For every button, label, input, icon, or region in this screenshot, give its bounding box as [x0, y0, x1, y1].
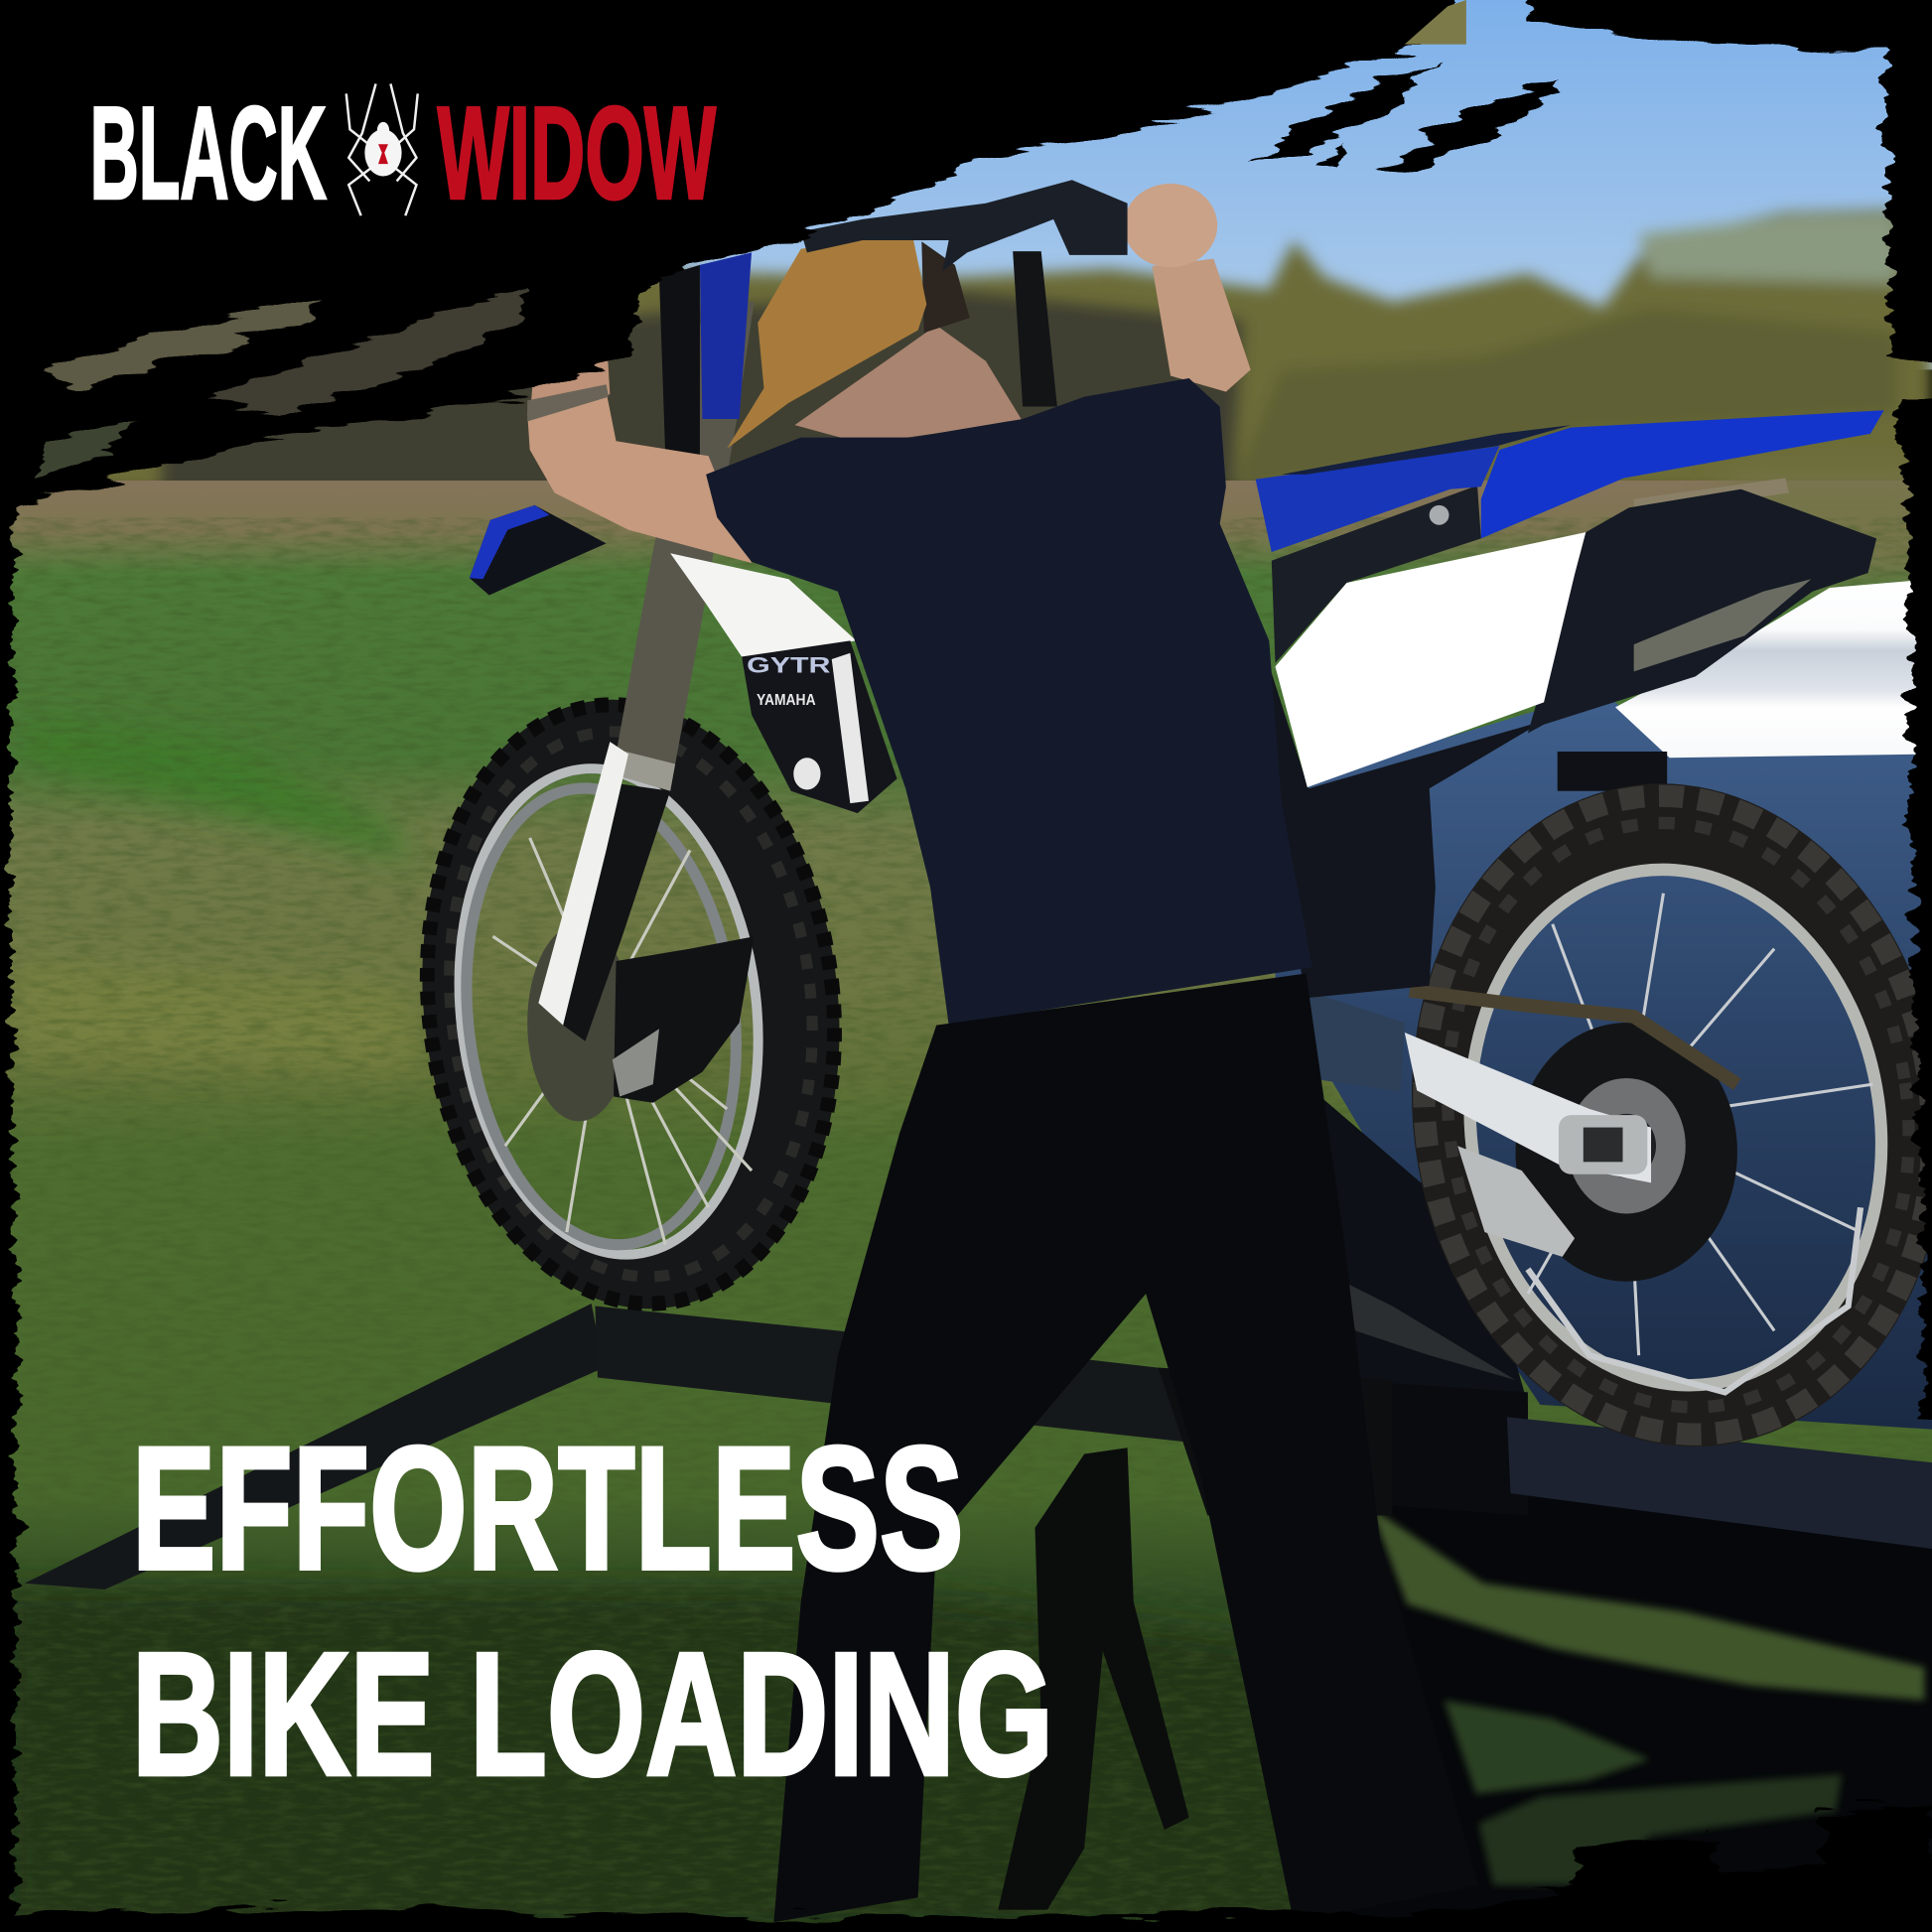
- icon: spider: [346, 83, 418, 215]
- bike front number plate: YAMAHA: [757, 691, 816, 709]
- logo: [90, 80, 716, 227]
- logo word: BLACK: BLACK: [90, 80, 327, 227]
- person: hair: [921, 241, 970, 333]
- title line 1: EFFORTLESS: [132, 1411, 964, 1606]
- rear wheel: [1369, 749, 1932, 1481]
- person: trousers: [773, 973, 1478, 1922]
- front wheel: [390, 677, 871, 1331]
- front spokes: [492, 838, 752, 1244]
- ground shadow under truck: [1330, 1392, 1932, 1932]
- brush stroke: left and bottom borders: [0, 492, 1932, 1932]
- bike white side panel: [1276, 532, 1586, 787]
- rear spokes: [1528, 894, 1872, 1355]
- bike exhaust: [1528, 479, 1876, 733]
- title: [132, 1411, 1053, 1812]
- lit grass patches: [1478, 1774, 1842, 1885]
- person: cap: [727, 231, 926, 449]
- fork guard: [538, 742, 628, 1026]
- handlebars and strap: [801, 180, 1128, 407]
- front fork and fender: [470, 252, 755, 1041]
- background: sky: [0, 0, 1932, 369]
- front fender: [470, 505, 607, 595]
- trailer ramp and carrier: [25, 1304, 1932, 1589]
- brake disc: [527, 924, 630, 1121]
- background: grass field: [0, 481, 1932, 1932]
- bike blue seat: [1256, 410, 1884, 552]
- bike front number plate: [670, 553, 897, 813]
- background strip above seam: [1405, 0, 1466, 45]
- tie-down strap: [998, 1448, 1189, 1910]
- person: arms: [527, 184, 1251, 563]
- lit grass strip upper: [1370, 1507, 1925, 1701]
- bike front number plate: GYTR: [747, 653, 830, 678]
- title line 2: BIKE LOADING: [132, 1616, 1053, 1812]
- brake caliper: [614, 936, 755, 1103]
- rear sprocket: [1516, 1023, 1737, 1282]
- background: grass texture: [0, 517, 1932, 1932]
- front rim: [434, 753, 783, 1271]
- brush stroke: top black mask: [0, 0, 1932, 1417]
- rear rim: [1438, 843, 1914, 1412]
- rear tyre: [1369, 749, 1932, 1481]
- background: tree line: [0, 209, 1932, 492]
- person: neck: [794, 326, 1023, 444]
- fork upper tube: [613, 302, 755, 791]
- bike tank top: [659, 265, 700, 456]
- bike rear: frame shadow: [1269, 485, 1544, 998]
- front tyre: [390, 677, 871, 1331]
- truck bed body: [1276, 579, 1932, 1430]
- fork lower leg: [563, 782, 670, 1041]
- swingarm and chain: [1307, 991, 1737, 1380]
- person: t-shirt: [706, 378, 1312, 1026]
- logo word: WIDOW: WIDOW: [438, 80, 716, 227]
- lit grass strip lower: [1445, 1701, 1650, 1794]
- rear brake rod: [1528, 1207, 1861, 1392]
- brush stroke: residual streaks: [37, 290, 530, 475]
- background: grass patches: [0, 475, 1932, 1932]
